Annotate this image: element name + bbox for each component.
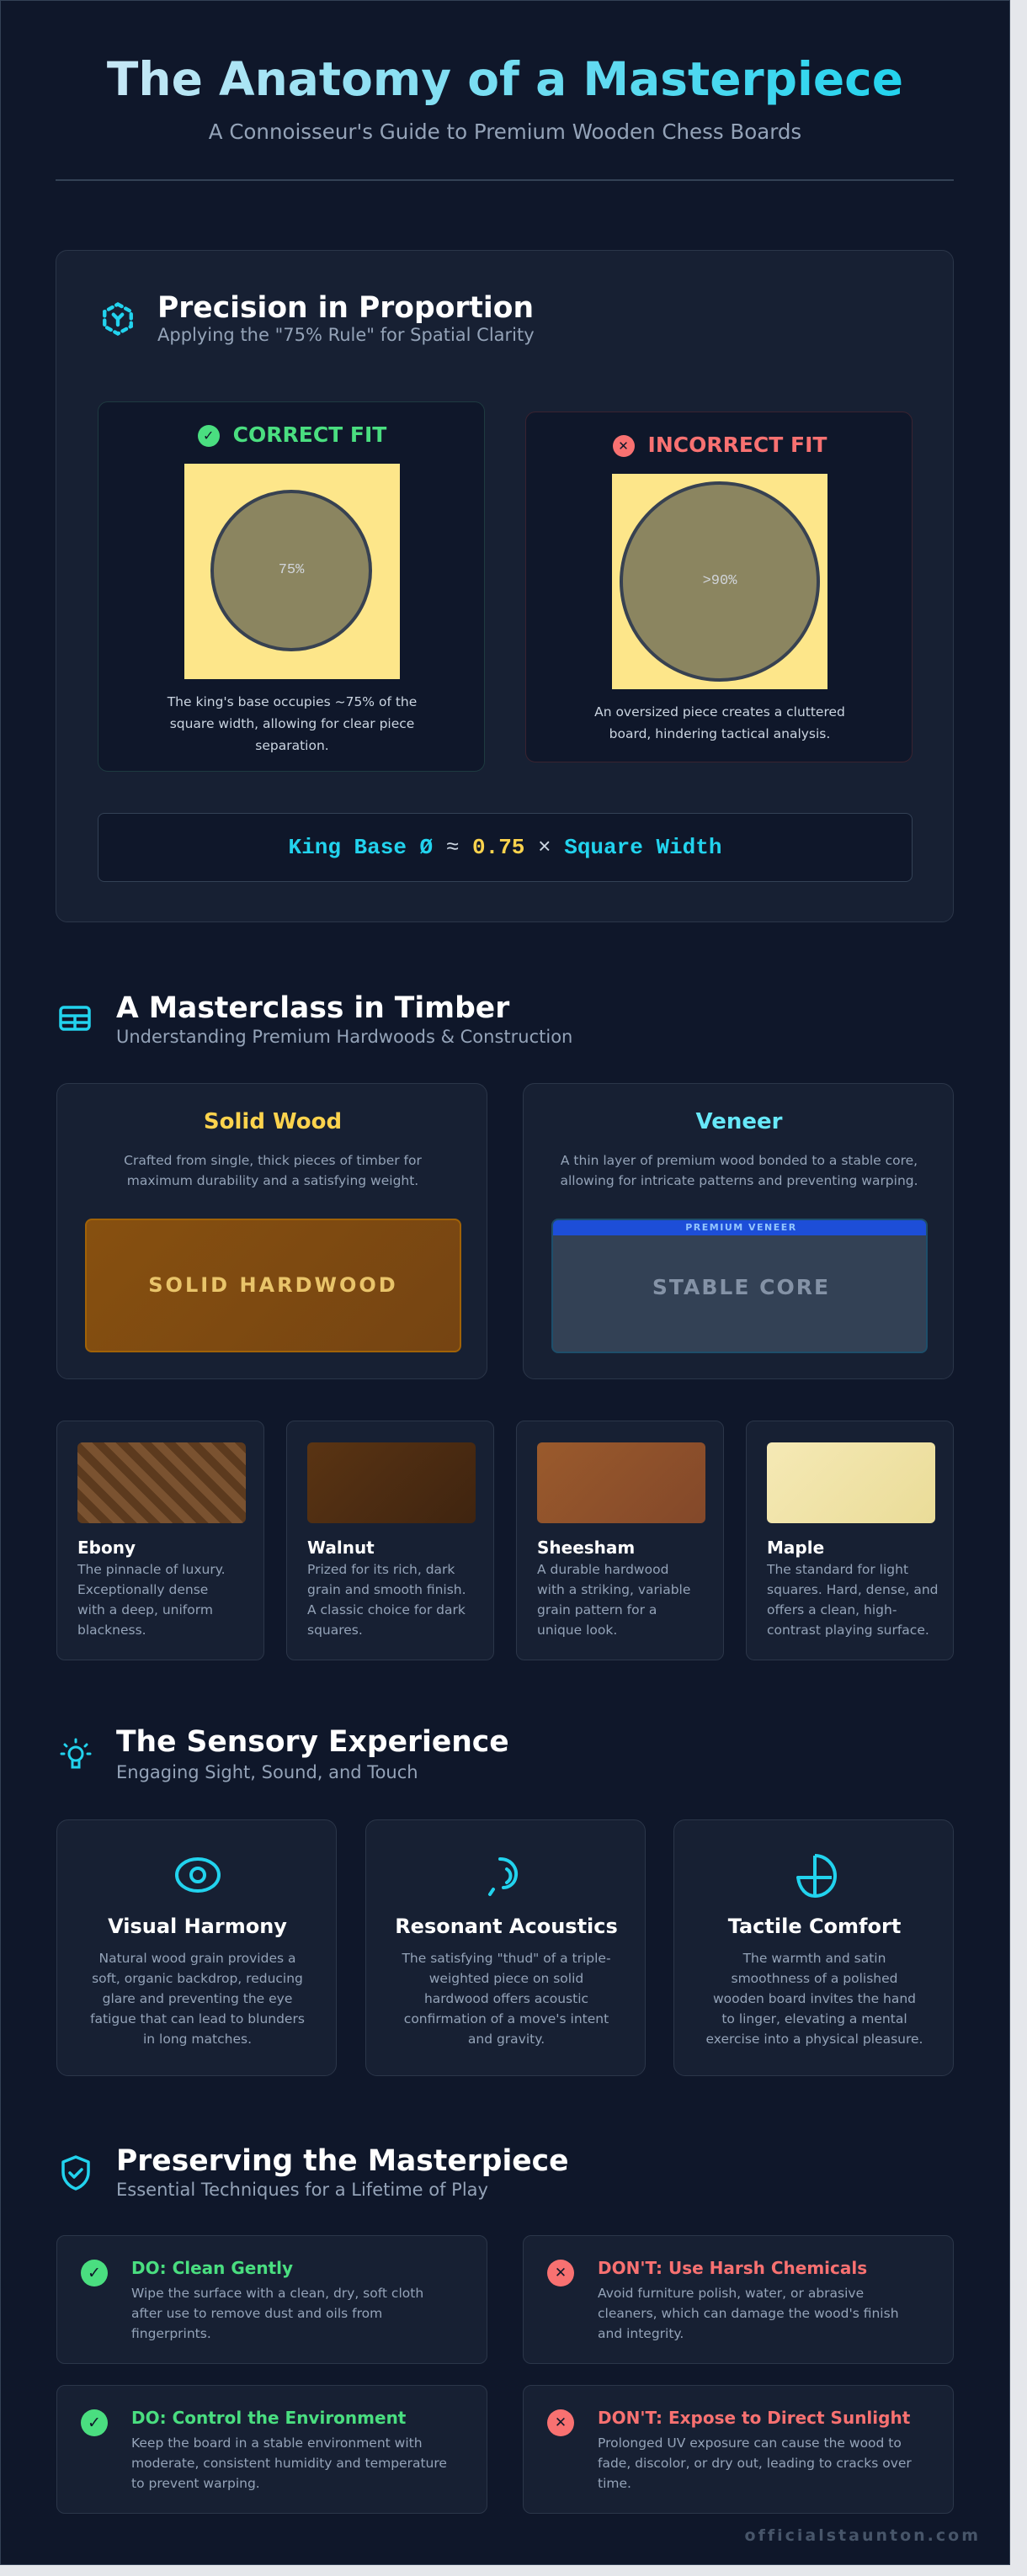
section heading: sensory [61,1725,509,1782]
icon: check: ✓ [88,2414,101,2432]
diagram: oversized circle: >90% [703,573,737,589]
panel: precision in proportion [56,250,954,922]
description: The pinnacle of luxury. Exceptionally dense with a deep, uniform blackness. [77,1562,226,1638]
description: smoothness of a polished [731,1971,897,1986]
description [705,1951,923,2047]
description: with a striking, variable [537,1582,690,1597]
description: The satisfying "thud" of a triple-weighted piece on solid hardwood offers acoustic confirmation of a move's intent and gravity. [402,1951,611,2047]
diagram: veneer layers: STABLE CORE [652,1275,830,1299]
description: A thin layer of premium wood bonded to a stable core, allowing for intricate patterns and preventing warping. [560,1153,918,1188]
formula box: King Base Ø ≈ 0.75 × Square Width [289,835,721,860]
name: Sheesham [537,1538,635,1558]
subheading: Essential Techniques for a Lifetime of Play [116,2180,488,2200]
wood card: ebony [56,1421,264,1660]
swatch [307,1442,476,1523]
description: Prolonged UV exposure can cause the wood to fade, discolor, or dry out, leading to cracks over time. [598,2435,912,2491]
icon: cross: ✕ [555,2265,567,2281]
diagram: 75% circle: 75% [279,562,304,578]
diagram: solid hardwood: SOLID HARDWOOD [148,1273,398,1297]
name: Walnut [307,1538,375,1558]
section heading: preserving [61,2144,569,2200]
heading: The Sensory Experience [116,1725,509,1759]
card: don't sunlight [523,2385,954,2514]
section heading: timber [59,991,572,1047]
name: Maple [767,1538,824,1558]
description: wooden board invites the hand [713,1991,916,2006]
diagram: 75% circle [184,464,400,679]
footer: officialstaunton.com [745,2526,981,2545]
icon: check: ✓ [88,2264,101,2282]
icon: layers [59,1006,91,1031]
title: DON'T: Expose to Direct Sunlight [598,2408,910,2428]
caption: The king's base occupies ~75% of the square width, allowing for clear piece separation. [168,694,417,753]
subheading: Understanding Premium Hardwoods & Construction [116,1027,572,1047]
heading: A Masterclass in Timber [116,991,509,1025]
wood card: maple [746,1421,954,1660]
icon: hand/leaf [796,1854,837,1898]
label: correct fit: ✓ [203,428,214,443]
description: grain pattern for a [537,1602,657,1617]
icon: lightbulb [61,1739,91,1769]
description [537,1562,690,1638]
subtitle: A Connoisseur's Guide to Premium Wooden Chess Boards [209,120,801,144]
icon: cross [547,2409,574,2436]
panel: solid wood [56,1083,487,1379]
description: Avoid furniture polish, water, or abrasive cleaners, which can damage the wood's finish and integrity. [598,2286,899,2341]
description: Natural wood grain provides a soft, organic backdrop, reducing glare and preventing the eye fatigue that can lead to blunders in long matches. [90,1951,305,2047]
caption: An oversized piece creates a cluttered [594,704,845,720]
title: The Anatomy of a Masterpiece [107,52,903,106]
heading: Preserving the Masterpiece [116,2144,569,2178]
diagram: veneer layers [551,1219,928,1353]
label: correct fit: CORRECT FIT [233,422,386,447]
formula box [98,813,913,882]
description: exercise into a physical pleasure. [705,2032,923,2047]
icon: sound [488,1857,519,1897]
description: The warmth and satin [743,1951,886,1966]
panel: veneer [523,1083,954,1379]
card: don't harsh chemicals [523,2235,954,2364]
diagram: veneer layers: PREMIUM VENEER [685,1222,797,1233]
card: do control environment [56,2385,487,2514]
title: DON'T: Use Harsh Chemicals [598,2258,867,2278]
description: Keep the board in a stable environment with moderate, consistent humidity and temperature to prevent warping. [131,2435,447,2491]
swatch [537,1442,705,1523]
card: tactile comfort [673,1819,954,2076]
swatch [77,1442,246,1523]
title: Resonant Acoustics [395,1915,618,1938]
icon: check [81,2260,108,2287]
heading: Precision in Proportion [157,291,534,325]
icon: shield [61,2155,90,2191]
panel: correct fit [98,401,485,772]
label: incorrect fit: INCORRECT FIT [648,433,827,457]
heading: Veneer [696,1109,782,1134]
card: visual harmony [56,1819,337,2076]
description: A durable hardwood [537,1562,668,1577]
card: resonant acoustics [365,1819,646,2076]
icon: cross: ✕ [555,2414,567,2431]
subheading: Applying the "75% Rule" for Spatial Clarity [157,325,535,345]
name: Ebony [77,1538,136,1558]
heading: Solid Wood [204,1109,342,1134]
caption [594,704,845,741]
description: Prized for its rich, dark grain and smooth finish. A classic choice for dark squares. [307,1562,466,1638]
wood card: sheesham [516,1421,724,1660]
wood card: walnut [286,1421,494,1660]
title: DO: Clean Gently [131,2258,293,2278]
caption: board, hindering tactical analysis. [609,726,830,741]
icon: dashed focus [103,302,133,336]
label: incorrect fit: ✕ [618,438,629,454]
title: Tactile Comfort [728,1915,901,1938]
icon: cross [547,2260,574,2287]
description: unique look. [537,1623,617,1638]
card: do clean gently [56,2235,487,2364]
description: Crafted from single, thick pieces of timber for maximum durability and a satisfying weight. [124,1153,422,1188]
diagram: oversized circle [612,474,827,689]
title: DO: Control the Environment [131,2408,406,2428]
description: The standard for light squares. Hard, dense, and offers a clean, high-contrast playing surface. [767,1562,939,1638]
icon: check [81,2409,108,2436]
icon: eye [175,1857,221,1893]
subheading: Engaging Sight, Sound, and Touch [116,1762,418,1782]
description: Wipe the surface with a clean, dry, soft cloth after use to remove dust and oils from fingerprints. [131,2286,423,2341]
title: Visual Harmony [108,1915,287,1938]
panel: incorrect fit [525,412,913,762]
description: to linger, elevating a mental [721,2011,907,2026]
swatch [767,1442,935,1523]
diagram: solid hardwood [85,1219,461,1352]
